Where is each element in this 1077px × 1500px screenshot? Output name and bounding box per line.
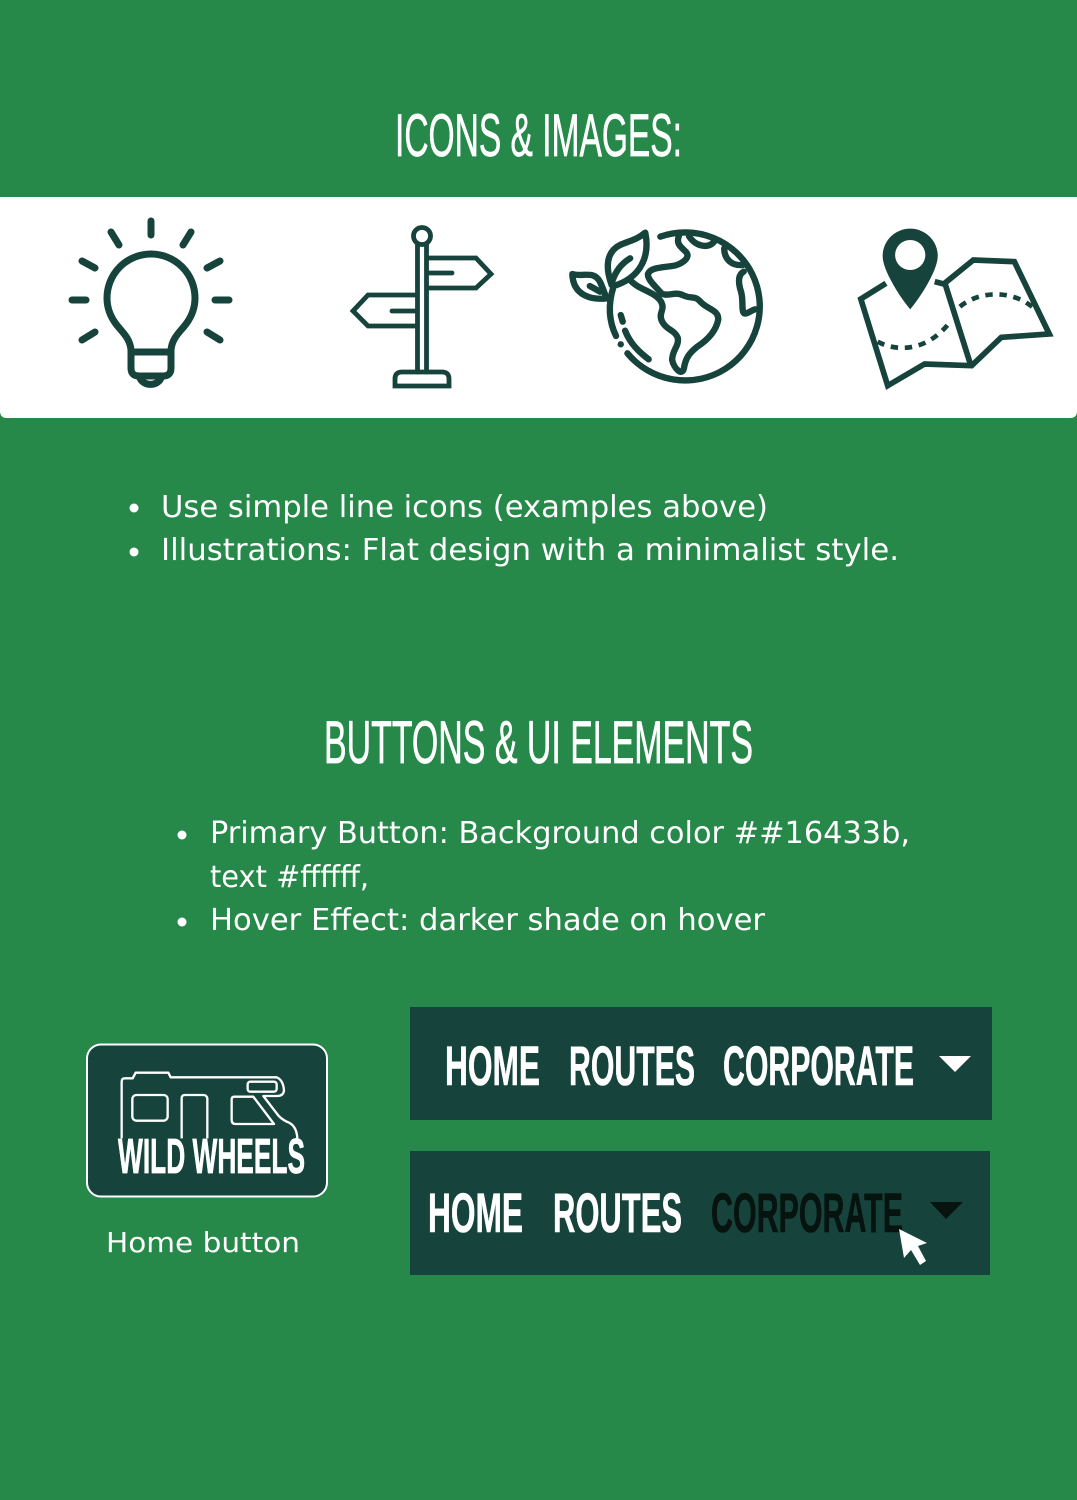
icon: globe with leaves [572,232,760,380]
navigation bar: hover state: CORPORATE [711,1181,903,1244]
home button logo [87,1044,327,1196]
navigation bar: default state: CORPORATE [723,1034,914,1097]
title: icons and images: ICONS & IMAGES: [395,102,682,169]
icon: mouse cursor [899,1229,927,1265]
caption: home button: Home button [106,1226,300,1259]
icon: camper van [122,1073,297,1138]
text block: button guidance: text #ffffff, [210,860,369,895]
icon: dropdown arrow [939,1056,971,1072]
text block: button guidance [178,816,910,938]
panel: icon band [0,197,1077,418]
title: buttons and UI elements: BUTTONS & UI ELEMENTS [324,709,753,776]
icon: dark dropdown arrow [930,1202,963,1219]
navigation bar: hover state: ROUTES [553,1181,682,1244]
icon: map with location pin [861,229,1049,386]
text block: icon guidance: Illustrations: Flat design with a minimalist style. [161,533,899,568]
text block: icon guidance: Use simple line icons (examples above) [161,490,768,525]
navigation bar: hover state: HOME [428,1181,523,1244]
icon: signpost [353,228,491,386]
navigation bar: default state: HOME [445,1034,540,1097]
text block: button guidance: Hover Effect: darker shade on hover [210,903,766,938]
navigation bar: hover state [410,1151,990,1275]
logo wordmark: WILD WHEELS [118,1130,305,1184]
text block: icon guidance [130,490,899,568]
navigation bar: default state: ROUTES [569,1034,695,1097]
navigation bar: default state [410,1007,992,1120]
text block: button guidance: Primary Button: Background color ##16433b, [210,816,910,851]
icon: light bulb [72,221,229,384]
